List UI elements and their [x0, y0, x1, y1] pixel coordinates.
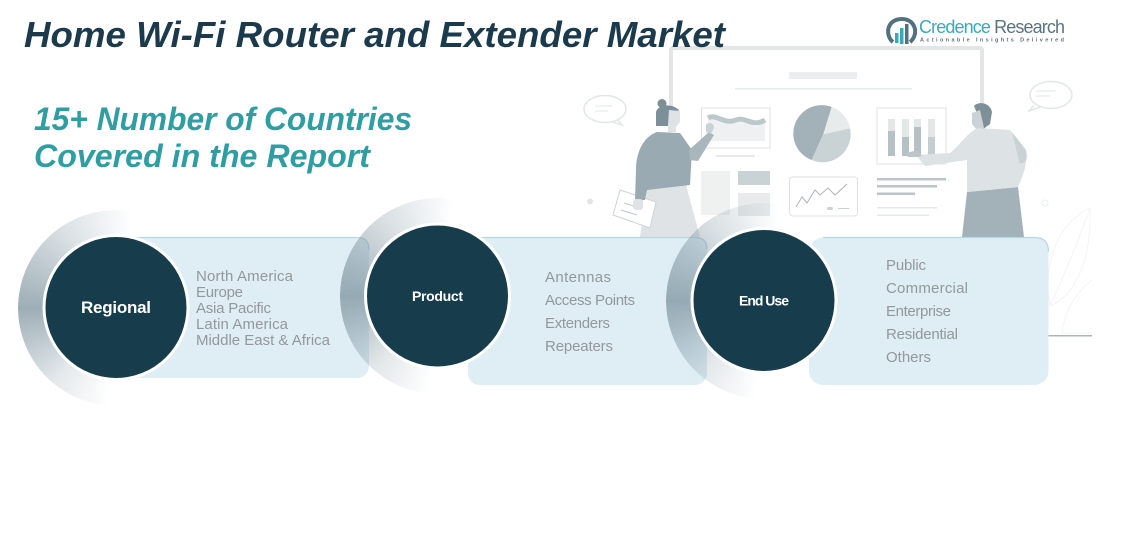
logo wordmark: Credence Research	[919, 17, 1065, 37]
regional card	[120, 238, 369, 378]
panel: End Use	[666, 202, 1048, 398]
regional circle	[44, 236, 188, 380]
layout blocks	[701, 171, 770, 216]
speech bubble left	[584, 96, 626, 125]
wave chart	[702, 108, 770, 157]
bar chart	[877, 108, 946, 164]
man presenter	[906, 103, 1027, 237]
product list	[545, 269, 635, 355]
line chart	[790, 177, 858, 216]
end use list	[886, 257, 968, 366]
regional crescent	[18, 210, 118, 402]
subtitle	[34, 101, 412, 174]
product list: Access Points	[545, 292, 635, 309]
end use list: Others	[886, 349, 931, 366]
baseline rule	[1048, 335, 1092, 336]
product heading: Product	[412, 288, 463, 304]
regional list: Middle East & Africa	[196, 332, 331, 349]
regional list: North America	[196, 268, 294, 285]
decorative dots	[587, 198, 1048, 206]
regional list: Latin America	[196, 316, 289, 333]
regional list: Asia Pacific	[196, 300, 272, 317]
product card	[468, 238, 707, 385]
panel: Regional	[18, 210, 369, 406]
end use list: Commercial	[886, 280, 968, 297]
end use heading: End Use	[739, 292, 789, 308]
title: Home Wi-Fi Router and Extender Market	[24, 14, 727, 55]
subtitle: 15+ Number of Countries	[34, 101, 412, 137]
logo icon	[888, 19, 915, 44]
regional heading: Regional	[81, 298, 151, 317]
product list: Extenders	[545, 315, 610, 332]
regional list: Europe	[196, 284, 243, 301]
woman presenter	[613, 99, 714, 237]
end use list: Enterprise	[886, 303, 951, 320]
illustration: presenters with dashboard	[584, 48, 1092, 333]
end use circle	[692, 228, 836, 372]
product circle	[366, 224, 510, 368]
logo tagline: Actionable Insights Delivered	[920, 38, 1064, 44]
speech bubble right	[1029, 82, 1072, 111]
product crescent	[340, 198, 440, 390]
panel: Product	[340, 198, 707, 394]
end use list: Public	[886, 257, 926, 274]
regional list	[196, 268, 331, 349]
product list: Repeaters	[545, 338, 613, 355]
end use card	[809, 238, 1048, 385]
presentation board	[671, 48, 982, 125]
pie chart	[793, 105, 851, 162]
text lines	[877, 178, 946, 216]
logo: Credence Research	[888, 17, 1065, 44]
end use list: Residential	[886, 326, 958, 343]
product list: Antennas	[545, 269, 611, 286]
end use crescent	[666, 204, 764, 395]
leaf outline	[1048, 208, 1092, 333]
subtitle: Covered in the Report	[34, 138, 371, 174]
